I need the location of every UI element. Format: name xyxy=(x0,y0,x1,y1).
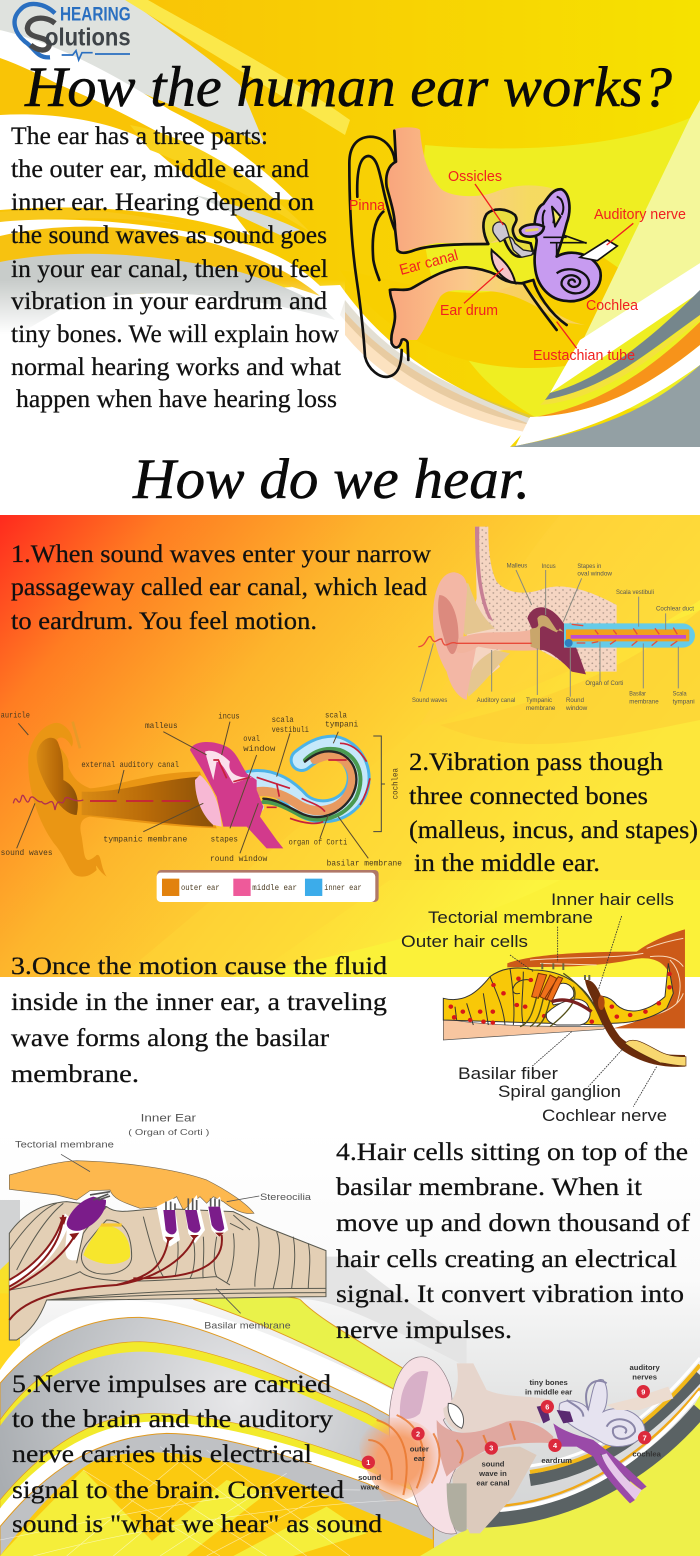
diagram: ear path with numbered steps xyxy=(358,1357,673,1534)
labels xyxy=(412,562,695,712)
tectorial membrane xyxy=(9,1161,254,1214)
labels: tympanic membrane xyxy=(103,835,188,844)
text block: step four: signal. It convert vibration into xyxy=(336,1281,684,1308)
logo word hearing: HEARING xyxy=(60,5,131,26)
panel: lower white and swoosh background xyxy=(0,977,700,1556)
text block: intro: vibration in your eardrum and xyxy=(11,288,328,315)
auditory nerve xyxy=(580,240,617,261)
labels: malleus xyxy=(145,722,178,731)
panel: intro background xyxy=(0,0,700,447)
labels: Tympanic xyxy=(526,697,553,704)
logo word solutions: olutions xyxy=(45,24,131,52)
label: Auditory nerve: Auditory nerve xyxy=(594,206,686,223)
step labels: cochlea xyxy=(632,1449,662,1458)
step labels: auditory xyxy=(630,1363,660,1372)
labels: membrane xyxy=(629,699,659,706)
text block: intro: the outer ear, middle ear and xyxy=(11,156,310,183)
leader lines xyxy=(510,916,657,1107)
labels: auricle xyxy=(1,712,30,721)
labels: Malleus xyxy=(507,562,528,569)
text block: step five: to the brain and the auditory xyxy=(12,1406,334,1433)
labels: ( Organ of Corti ) xyxy=(128,1127,209,1137)
inner hair cell and nerve xyxy=(585,980,685,1067)
step labels: ear xyxy=(414,1454,425,1463)
text block: intro: in your ear canal, then you feel xyxy=(11,256,328,283)
ear outlines xyxy=(349,131,567,377)
text block: intro xyxy=(11,123,341,413)
labels: organ of Corti xyxy=(289,839,347,848)
ear canal xyxy=(437,1420,553,1477)
ear tissue xyxy=(387,127,585,348)
middle ear xyxy=(527,607,586,674)
labels: Cochlear duct xyxy=(656,606,694,613)
labels xyxy=(1,711,402,868)
text block: intro: the sound waves as sound goes xyxy=(11,222,327,249)
labels: Incus xyxy=(542,563,556,570)
label: Eustachian tube: Eustachian tube xyxy=(533,347,635,364)
leader lines xyxy=(17,722,368,858)
step labels: outer xyxy=(410,1445,429,1454)
text block: step three: membrane. xyxy=(11,1061,139,1088)
cell dividers xyxy=(455,968,530,1025)
text block: step four: nerve impulses. xyxy=(336,1317,512,1344)
leader lines xyxy=(464,184,633,348)
ossicles xyxy=(493,222,533,257)
text block: intro: inner ear. Hearing depend on xyxy=(11,189,315,216)
labels: Organ of Corti xyxy=(585,680,624,687)
heading: How do we hear: How do we hear. xyxy=(132,448,530,511)
text block: step two: three connected bones xyxy=(409,783,648,810)
leader lines xyxy=(420,570,678,697)
text block: step two: in the middle ear. xyxy=(414,850,600,877)
labels: scala xyxy=(272,716,294,725)
marker numbers: 7 xyxy=(643,1433,647,1442)
text block: intro: happen when have hearing loss xyxy=(16,386,337,413)
labels: stapes xyxy=(211,835,238,844)
step labels: ear canal xyxy=(476,1478,510,1487)
text block: step three: 3.Once the motion cause the fluid xyxy=(11,953,388,980)
labels: Round xyxy=(566,697,584,704)
text block: intro: The ear has a three parts: xyxy=(11,123,268,150)
labels: incus xyxy=(218,713,240,722)
step labels: in middle ear xyxy=(525,1387,572,1396)
outer ear xyxy=(28,723,217,877)
labels: vestibuli xyxy=(272,726,309,735)
labels: scala xyxy=(325,711,347,720)
labels: Stereocilia xyxy=(260,1192,311,1202)
outer ear xyxy=(433,572,477,700)
marker numbers: 1 xyxy=(366,1458,370,1467)
right valley bands xyxy=(420,1395,700,1556)
labels xyxy=(15,1113,311,1330)
tectorial membrane and brown tissue xyxy=(507,929,685,1028)
legend: outer ear xyxy=(181,884,220,893)
tunnel spaces xyxy=(552,983,574,1005)
labels: sound waves xyxy=(1,849,53,858)
nerve fibres xyxy=(9,1215,222,1320)
label: Outer hair cells: Outer hair cells xyxy=(401,932,528,951)
tunnel xyxy=(81,1220,132,1274)
text block: step one: passageway called ear canal, which lead xyxy=(11,574,428,601)
sound wave xyxy=(13,795,83,810)
text block: step five xyxy=(12,1371,383,1538)
panel: section two background xyxy=(0,515,700,977)
marker numbers: 9 xyxy=(641,1387,645,1396)
text block: step three: wave forms along the basilar xyxy=(11,1025,330,1052)
sound waves xyxy=(359,1417,439,1502)
text block: step four: hair cells creating an electrical xyxy=(336,1246,677,1273)
diagram: ear with cochlea and colour legend xyxy=(1,711,402,902)
labels: Stapes in xyxy=(577,563,602,570)
icon: S letter xyxy=(27,18,55,50)
labels: Scala xyxy=(673,691,687,698)
ossicles xyxy=(530,615,563,650)
legend: inner ear xyxy=(324,884,362,893)
eustachian tube xyxy=(553,1423,647,1503)
icon: pulse line xyxy=(62,51,130,60)
inner ear xyxy=(559,1379,645,1447)
leader lines xyxy=(61,1154,259,1313)
tan cartilage xyxy=(455,582,495,635)
label: Inner hair cells: Inner hair cells xyxy=(551,890,674,909)
labels: window xyxy=(243,745,276,754)
hair cell voids xyxy=(9,1213,83,1287)
label: Pinna: Pinna xyxy=(349,197,386,214)
text block: step five: 5.Nerve impulses are carried xyxy=(12,1371,332,1398)
labels: Auditory canal xyxy=(477,697,516,704)
outer ear xyxy=(389,1357,461,1534)
step labels: sound xyxy=(482,1460,505,1469)
logo: Hearing Solutions xyxy=(15,4,131,60)
text block: step two xyxy=(409,749,698,877)
step labels: wave xyxy=(360,1483,379,1492)
labels: Basilar membrane xyxy=(204,1320,291,1330)
nerve fibres xyxy=(520,973,603,1027)
labels: tympani xyxy=(673,699,695,706)
ear canal xyxy=(457,630,540,653)
diagram: ear cross section with cochlea straightened xyxy=(412,527,695,712)
diagram: ear anatomy with red labels xyxy=(349,127,633,377)
auditory nerves xyxy=(607,1387,673,1410)
outer hair cells xyxy=(532,973,563,1002)
text block: step three: inside in the inner ear, a traveling xyxy=(11,989,388,1016)
text block: intro: normal hearing works and what xyxy=(11,354,341,381)
label: Basilar fiber: Basilar fiber xyxy=(458,1064,558,1083)
legend xyxy=(157,870,379,902)
wave arrows xyxy=(418,624,677,647)
labels: window xyxy=(565,705,587,712)
supporting cells xyxy=(443,968,603,1025)
text block: step one: to eardrum. You feel motion. xyxy=(11,608,317,635)
labels: tympani xyxy=(325,721,358,730)
labels: Inner Ear xyxy=(141,1113,196,1125)
labels: round window xyxy=(210,855,268,864)
basilar base xyxy=(443,1018,607,1040)
labels: cochlea xyxy=(391,768,400,799)
step labels: tiny bones xyxy=(529,1378,568,1387)
label: Ossicles: Ossicles xyxy=(448,168,502,185)
text block: step three xyxy=(11,953,388,1088)
legend: middle ear xyxy=(252,884,297,893)
hair cells xyxy=(67,1197,106,1231)
step markers xyxy=(362,1385,651,1469)
temporal bone xyxy=(463,527,617,692)
cell dividers xyxy=(9,1203,326,1300)
diagram: inner ear organ of Corti xyxy=(9,1113,326,1340)
step labels xyxy=(358,1363,662,1492)
title: How the human ear works? xyxy=(24,56,673,119)
text block: step five: signal to the brain. Converted xyxy=(12,1477,345,1504)
step labels: nerves xyxy=(632,1372,657,1381)
step labels: sound xyxy=(358,1473,381,1482)
labels: membrane xyxy=(526,705,556,712)
text block: step four xyxy=(336,1139,691,1344)
marker numbers: 6 xyxy=(545,1402,549,1411)
icon: ear arc xyxy=(15,4,55,57)
ear drum xyxy=(492,250,515,283)
text block: step four: basilar membrane. When it xyxy=(336,1174,642,1201)
labels: Scala vestibuli xyxy=(616,589,654,596)
text block: step two: 2.Vibration pass though xyxy=(409,749,664,776)
label: Spiral ganglion: Spiral ganglion xyxy=(498,1082,621,1101)
text block: step five: sound is "what we hear" as sound xyxy=(12,1511,383,1538)
labels: oval xyxy=(243,735,260,744)
middle ear bones xyxy=(190,742,283,848)
label: Ear canal: Ear canal xyxy=(398,247,460,279)
middle ear bones xyxy=(537,1405,573,1423)
text block: step four: move up and down thousand of xyxy=(336,1210,691,1237)
marker numbers: 4 xyxy=(553,1441,558,1450)
step labels: wave in xyxy=(478,1469,507,1478)
labels: basilar membrane xyxy=(327,859,402,868)
text block: step five: nerve carries this electrical xyxy=(12,1441,312,1468)
text block: step four: 4.Hair cells sitting on top of the xyxy=(336,1139,688,1166)
labels: Sound waves xyxy=(412,697,448,704)
marker numbers xyxy=(366,1387,647,1467)
text block: step one xyxy=(11,541,431,635)
diagram: organ of Corti cross section xyxy=(443,916,686,1107)
cream tissue xyxy=(9,1202,326,1340)
labels: external auditory canal xyxy=(81,761,179,770)
text block: intro: tiny bones. We will explain how xyxy=(11,321,339,348)
text block: step two: (malleus, incus, and stapes) xyxy=(409,817,698,844)
cochlea bracket xyxy=(373,736,385,832)
marker numbers: 3 xyxy=(489,1444,493,1453)
label: Cochlea: Cochlea xyxy=(586,297,639,314)
labels: Basilar xyxy=(629,691,647,698)
temporal bone xyxy=(443,1363,553,1434)
label: Tectorial membrane: Tectorial membrane xyxy=(428,908,593,927)
red arrows xyxy=(90,743,370,823)
label: Ear drum: Ear drum xyxy=(440,302,498,319)
marker numbers: 2 xyxy=(416,1429,420,1438)
labels: oval window xyxy=(577,571,612,578)
tympanic membrane xyxy=(195,775,222,827)
labels: Tectorial membrane xyxy=(15,1140,114,1150)
inner ear tube xyxy=(250,747,360,819)
label: Cochlear nerve: Cochlear nerve xyxy=(542,1106,667,1125)
cochlea tube xyxy=(564,623,695,648)
cochlea and canals xyxy=(520,189,601,301)
middle ear chamber xyxy=(483,209,533,257)
step labels: eardrum xyxy=(541,1456,572,1465)
text block: step one: 1.When sound waves enter your narrow xyxy=(11,541,431,568)
